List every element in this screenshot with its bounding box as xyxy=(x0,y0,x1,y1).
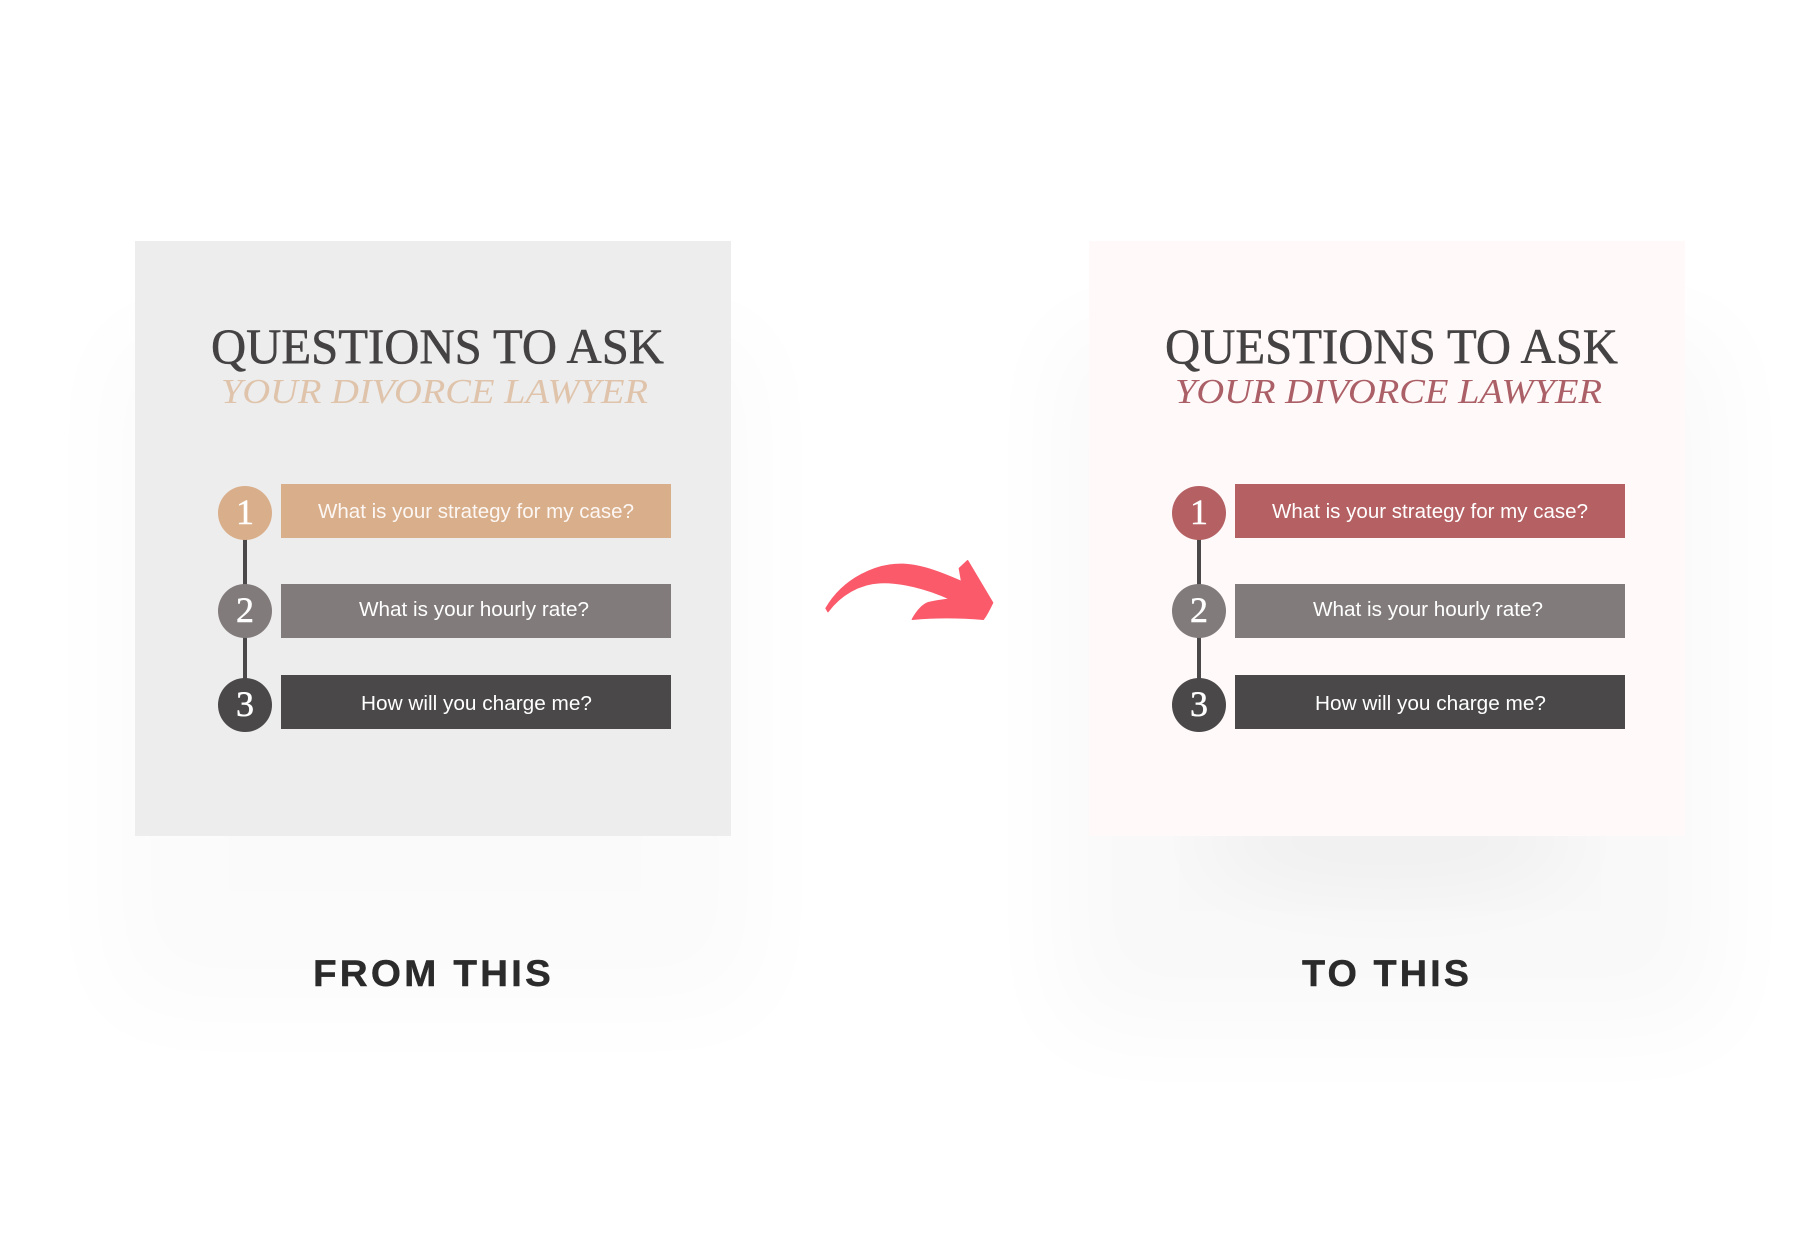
step 1: 1 xyxy=(1190,492,1208,532)
step 2: What is your hourly rate? xyxy=(359,599,589,621)
step 1 xyxy=(218,484,671,540)
label: from this: FROM THIS xyxy=(313,953,554,994)
label: to this: TO THIS xyxy=(1302,953,1472,994)
panel: to this xyxy=(1089,241,1685,836)
step 3: How will you charge me? xyxy=(1315,693,1546,715)
subheading: your divorce lawyer: YOUR DIVORCE LAWYER xyxy=(221,372,648,411)
step 2: 2 xyxy=(236,590,254,630)
timeline connector xyxy=(1197,535,1201,685)
arrow xyxy=(826,561,993,619)
step 3: How will you charge me? xyxy=(361,693,592,715)
step 2: 2 xyxy=(1190,590,1208,630)
step 3 xyxy=(218,675,671,732)
step 1 xyxy=(1172,484,1625,540)
step 2 xyxy=(218,584,671,638)
subheading: your divorce lawyer: YOUR DIVORCE LAWYER xyxy=(1175,372,1602,411)
step 1: What is your strategy for my case? xyxy=(318,501,634,523)
step 1: 1 xyxy=(236,492,254,532)
step 1: What is your strategy for my case? xyxy=(1272,501,1588,523)
shadow: left panel xyxy=(110,330,760,1010)
step 2: What is your hourly rate? xyxy=(1313,599,1543,621)
step 2 xyxy=(1172,584,1625,638)
step 3: 3 xyxy=(236,684,254,724)
step 3: 3 xyxy=(1190,684,1208,724)
shadow: right panel xyxy=(1060,330,1720,1030)
heading: questions to ask: QUESTIONS TO ASK xyxy=(211,318,664,374)
timeline connector xyxy=(243,535,247,685)
panel: from this xyxy=(135,241,731,836)
heading: questions to ask: QUESTIONS TO ASK xyxy=(1165,318,1618,374)
step 3 xyxy=(1172,675,1625,732)
